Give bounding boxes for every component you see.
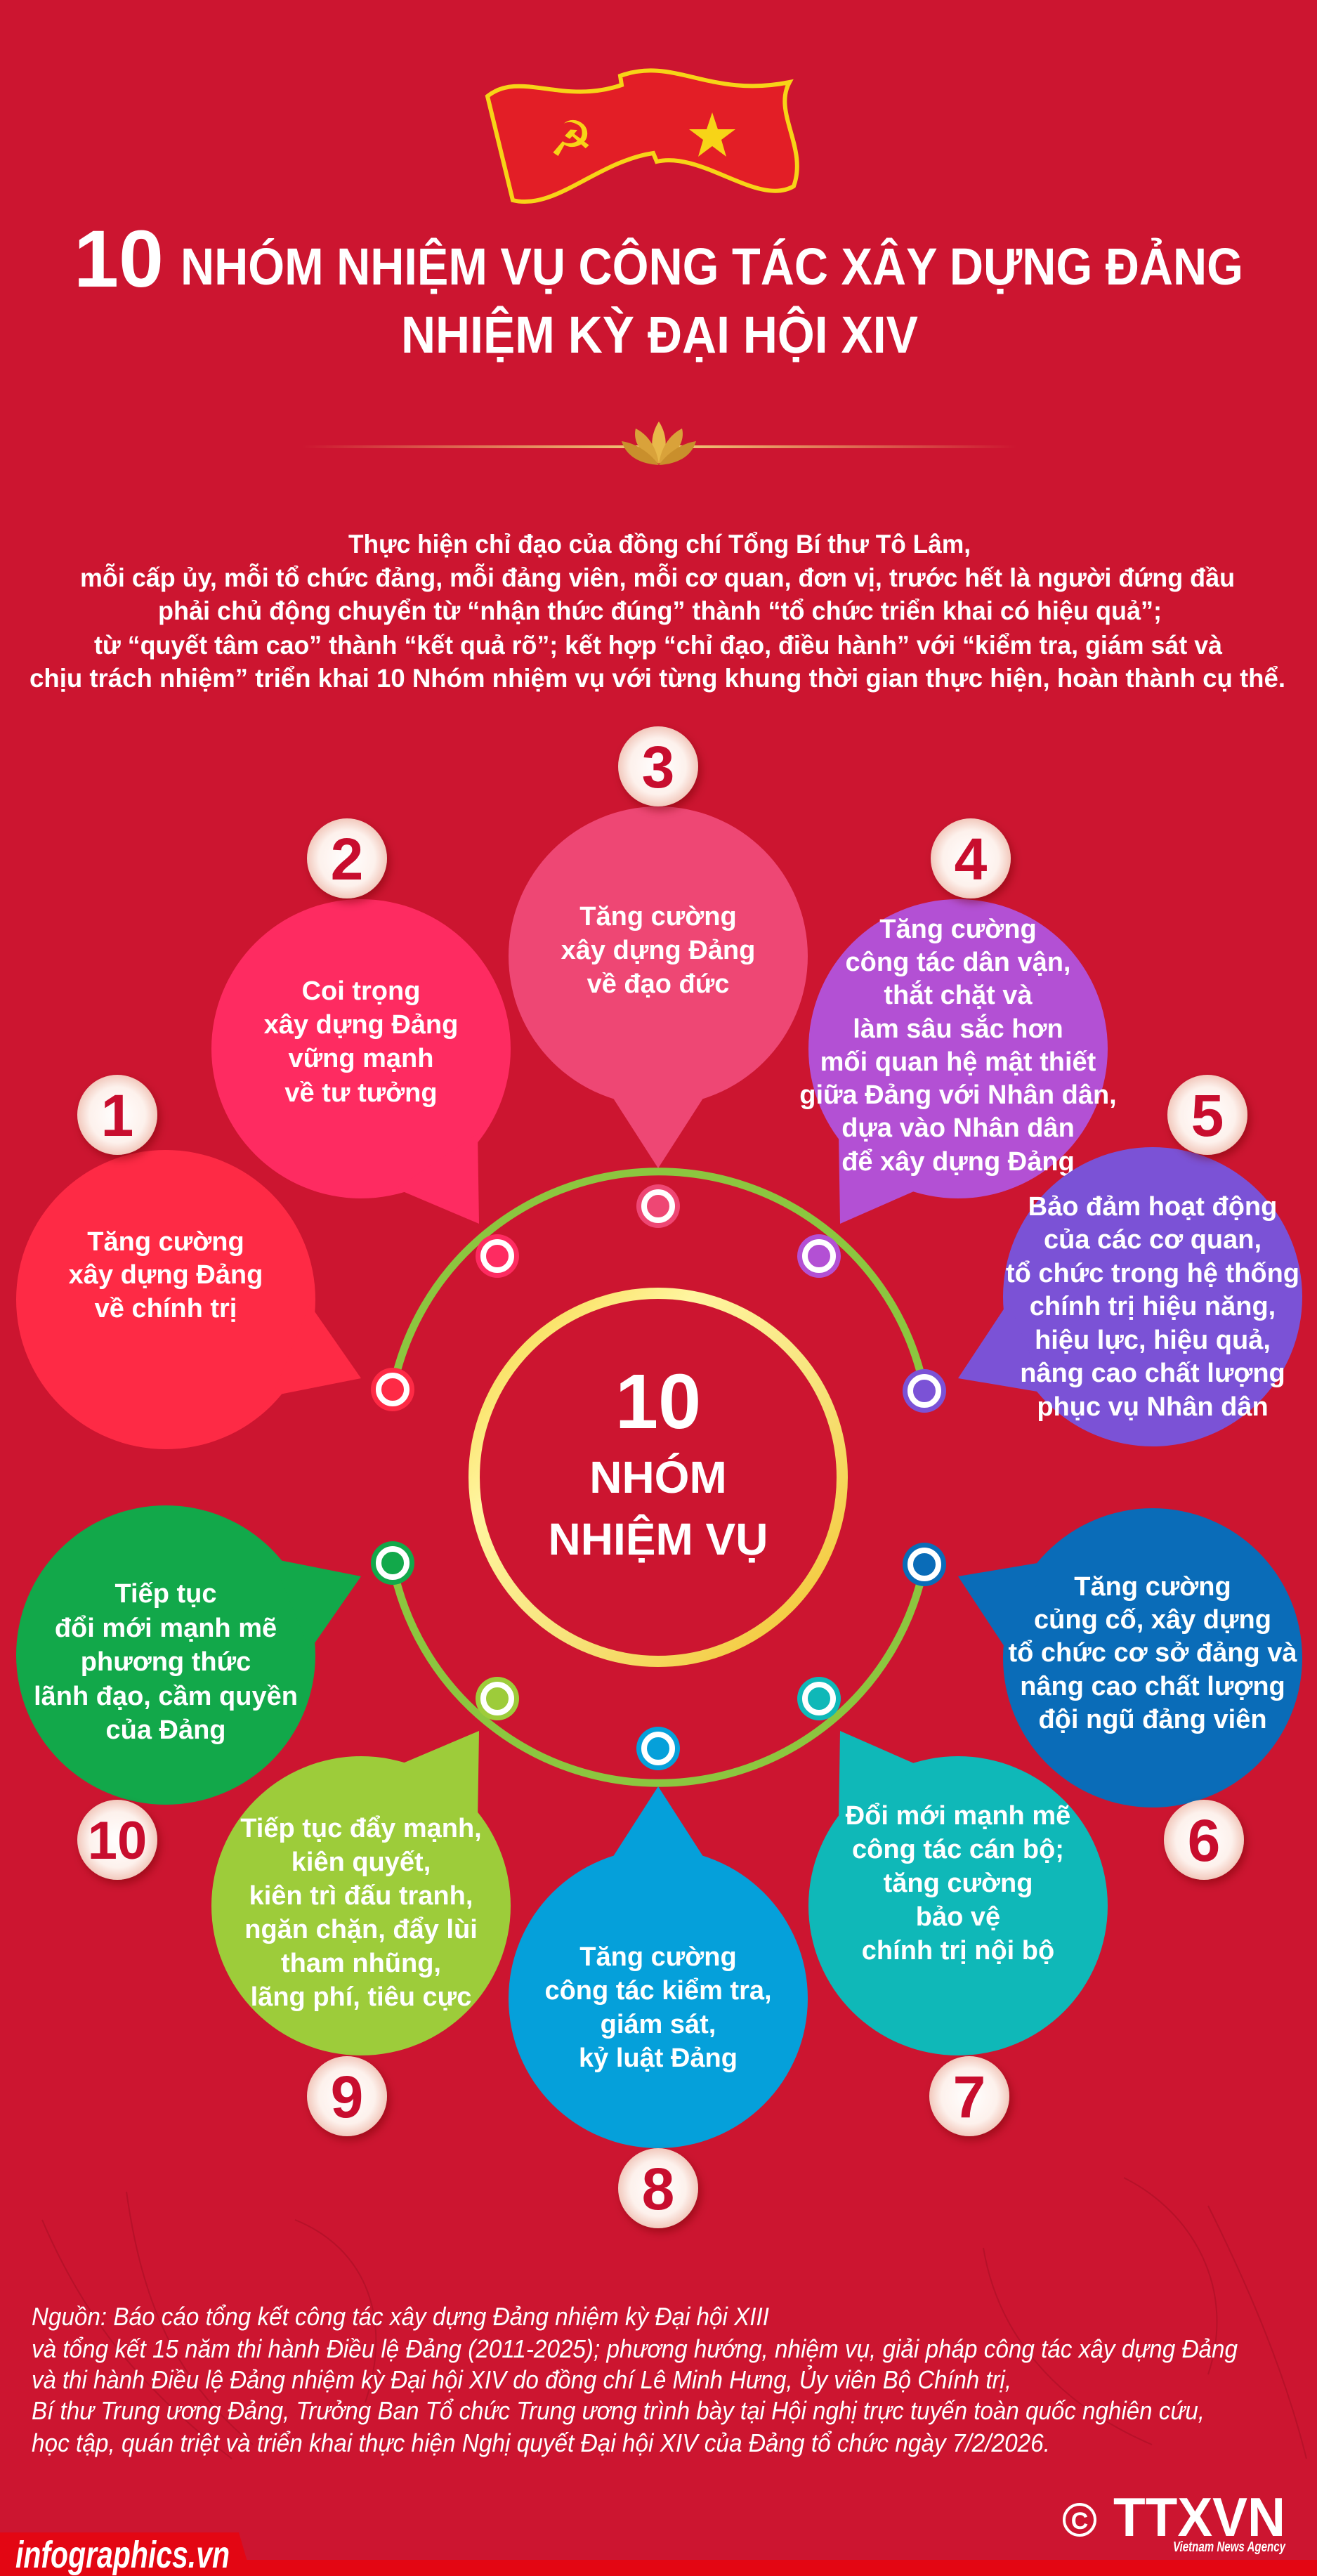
panel: task 4: thắt chặt và	[884, 979, 1033, 1010]
intro paragraph: chịu trách nhiệm” triển khai 10 Nhóm nhiệm vụ với từng khung thời gian thực hiện, hoàn thành cụ thể.	[30, 664, 1285, 693]
panel: task 1: về chính trị	[95, 1294, 237, 1323]
logo: TTXVN: TTXVN	[1113, 2486, 1285, 2548]
logo: TTXVN	[1064, 2486, 1286, 2555]
panel: task 2: xây dựng Đảng	[264, 1010, 458, 1040]
icon: party flag: ☭	[549, 110, 593, 168]
panel: task 9: Tiếp tục đẩy mạnh,	[240, 1814, 482, 1843]
panel: task 3: xây dựng Đảng	[561, 936, 755, 965]
panel: task 9: ngăn chặn, đẩy lùi	[244, 1915, 478, 1944]
markers on arc	[371, 1184, 946, 1770]
panel: task 3: về đạo đức	[587, 969, 729, 999]
title: NHIỆM KỲ ĐẠI HỘI XIV	[401, 306, 918, 364]
panel: task 2: vững mạnh	[289, 1044, 433, 1073]
panel: task 8: kỷ luật Đảng	[579, 2044, 738, 2073]
panel: task 6: Tăng cường	[1074, 1572, 1231, 1602]
panel: task 5: phục vụ Nhân dân	[1037, 1392, 1269, 1422]
center circle: 10 nhóm nhiệm vụ: 10	[615, 1359, 701, 1445]
panel: task 4: Tăng cường	[879, 915, 1037, 944]
panel: task 5: của các cơ quan,	[1044, 1225, 1262, 1255]
panel: task 9: lãng phí, tiêu cực	[251, 1982, 471, 2012]
panel: task 7: Đổi mới mạnh mẽ	[846, 1801, 1070, 1831]
panel: task 8: Tăng cường	[579, 1942, 737, 1972]
center circle: 10 nhóm nhiệm vụ: NHÓM	[589, 1452, 727, 1503]
source text	[32, 2302, 1238, 2457]
source text: và thi hành Điều lệ Đảng nhiệm kỳ Đại hội XIV do đồng chí Lê Minh Hưng, Ủy viên Bộ Chính trị,	[32, 2365, 1011, 2394]
source text: học tập, quán triệt và triển khai thực hiện Nghị quyết Đại hội XIV của Đảng tổ chức ngày 7/2/2026.	[32, 2428, 1050, 2457]
panel: task 9	[211, 1731, 511, 2055]
divider with lotus	[302, 421, 1016, 465]
panel: task 6: tổ chức cơ sở đảng và	[1009, 1638, 1297, 1668]
number badges: 4	[955, 826, 988, 892]
number badges: 8	[642, 2156, 674, 2222]
panel: task 9: kiên trì đấu tranh,	[249, 1881, 473, 1911]
number badges: 3	[642, 734, 674, 800]
panel: task 6: củng cố, xây dựng	[1034, 1605, 1271, 1635]
panel: task 5: Bảo đảm hoạt động	[1028, 1192, 1277, 1222]
panel: task 8	[509, 1786, 808, 2148]
panel: task 7	[808, 1731, 1108, 2055]
intro paragraph: từ “quyết tâm cao” thành “kết quả rõ”; kết hợp “chỉ đạo, điều hành” với “kiểm tra, giám sát và	[94, 631, 1222, 660]
number badges	[77, 726, 1247, 2228]
panel: task 2: Coi trọng	[302, 976, 420, 1006]
panel: task 6	[958, 1508, 1302, 1807]
number badges: 6	[1188, 1807, 1220, 1874]
panel: task 3	[509, 806, 808, 1168]
panel: task 2: về tư tưởng	[284, 1078, 438, 1108]
panel: task 4	[799, 899, 1117, 1224]
panel: task 7: bảo vệ	[916, 1902, 1000, 1932]
panel: task 4: dựa vào Nhân dân	[841, 1113, 1075, 1143]
panel: task 10: Tiếp tục	[115, 1579, 216, 1609]
source text: và tổng kết 15 năm thi hành Điều lệ Đảng (2011-2025); phương hướng, nhiệm vụ, giải pháp công tác xây dựng Đảng	[32, 2334, 1238, 2363]
panel: task 4: giữa Đảng với Nhân dân,	[799, 1080, 1117, 1110]
number badges: 10	[88, 1811, 147, 1871]
panel: task 10	[16, 1505, 361, 1805]
panel: task 4: làm sâu sắc hơn	[853, 1013, 1063, 1044]
center circle: 10 nhóm nhiệm vụ: NHIỆM VỤ	[549, 1513, 768, 1564]
intro paragraph: Thực hiện chỉ đạo của đồng chí Tổng Bí thư Tô Lâm,	[348, 530, 971, 558]
center circle: 10 nhóm nhiệm vụ	[474, 1293, 842, 1661]
title	[74, 214, 1243, 364]
panel: task 4: công tác dân vận,	[846, 948, 1070, 977]
panel: task 3: Tăng cường	[579, 902, 737, 931]
intro paragraph	[30, 530, 1285, 693]
number badges: 7	[953, 2064, 985, 2130]
panel: task 10: của Đảng	[105, 1715, 226, 1745]
panel: task 5: nâng cao chất lượng	[1020, 1359, 1285, 1388]
intro paragraph: phải chủ động chuyển từ “nhận thức đúng” thành “tổ chức triển khai có hiệu quả”;	[158, 596, 1162, 625]
title: 10	[74, 214, 164, 304]
panel: task 10: đổi mới mạnh mẽ	[55, 1614, 277, 1643]
number badges: 1	[101, 1083, 133, 1149]
green connecting arcs	[393, 1172, 924, 1783]
panel: task 7: chính trị nội bộ	[862, 1936, 1054, 1966]
panel: task 9: tham nhũng,	[281, 1949, 441, 1978]
panel: task 7: tăng cường	[884, 1869, 1033, 1898]
panel: task 2	[211, 899, 511, 1224]
panel: task 1: Tăng cường	[87, 1227, 244, 1257]
panel: task 5: chính trị hiệu năng,	[1030, 1292, 1276, 1321]
panel: task 5: hiệu lực, hiệu quả,	[1035, 1326, 1271, 1355]
panel: task 1	[16, 1150, 361, 1449]
number badges: 5	[1191, 1083, 1224, 1149]
panel: task 6: nâng cao chất lượng	[1020, 1672, 1285, 1701]
source text: Nguồn: Báo cáo tổng kết công tác xây dựng Đảng nhiệm kỳ Đại hội XIII	[32, 2302, 769, 2331]
panel: task 5: tổ chức trong hệ thống	[1006, 1259, 1299, 1288]
icon: party flag	[487, 70, 797, 202]
number badges: 9	[331, 2064, 363, 2130]
panel: task 8: giám sát,	[601, 2010, 716, 2039]
panel: task 6: đội ngũ đảng viên	[1038, 1705, 1267, 1734]
panel: task 4: để xây dựng Đảng	[841, 1147, 1075, 1177]
decorative lotus sketch background	[42, 2178, 1306, 2459]
panel: task 8: công tác kiểm tra,	[544, 1976, 772, 2006]
panel: task 10: phương thức	[81, 1647, 251, 1677]
intro paragraph: mỗi cấp ủy, mỗi tổ chức đảng, mỗi đảng viên, mỗi cơ quan, đơn vị, trước hết là người đứng đầu	[80, 563, 1235, 592]
source text: Bí thư Trung ương Đảng, Trưởng Ban Tổ chức Trung ương trình bày tại Hội nghị trực tuyến toàn quốc nghiên cứu,	[32, 2396, 1205, 2425]
logo: TTXVN: C	[1071, 2508, 1088, 2535]
panel: task 9: kiên quyết,	[291, 1848, 431, 1877]
panel: task 5	[958, 1147, 1302, 1446]
panel: task 1: xây dựng Đảng	[69, 1260, 263, 1290]
panel: task 10: lãnh đạo, cầm quyền	[34, 1682, 298, 1711]
footer bar: infographics.vn	[0, 2532, 1317, 2576]
footer bar: infographics.vn: infographics.vn	[15, 2534, 230, 2576]
number badges: 2	[331, 826, 363, 892]
panel: task 7: công tác cán bộ;	[852, 1835, 1064, 1864]
panel: task 4: mối quan hệ mật thiết	[820, 1047, 1096, 1077]
